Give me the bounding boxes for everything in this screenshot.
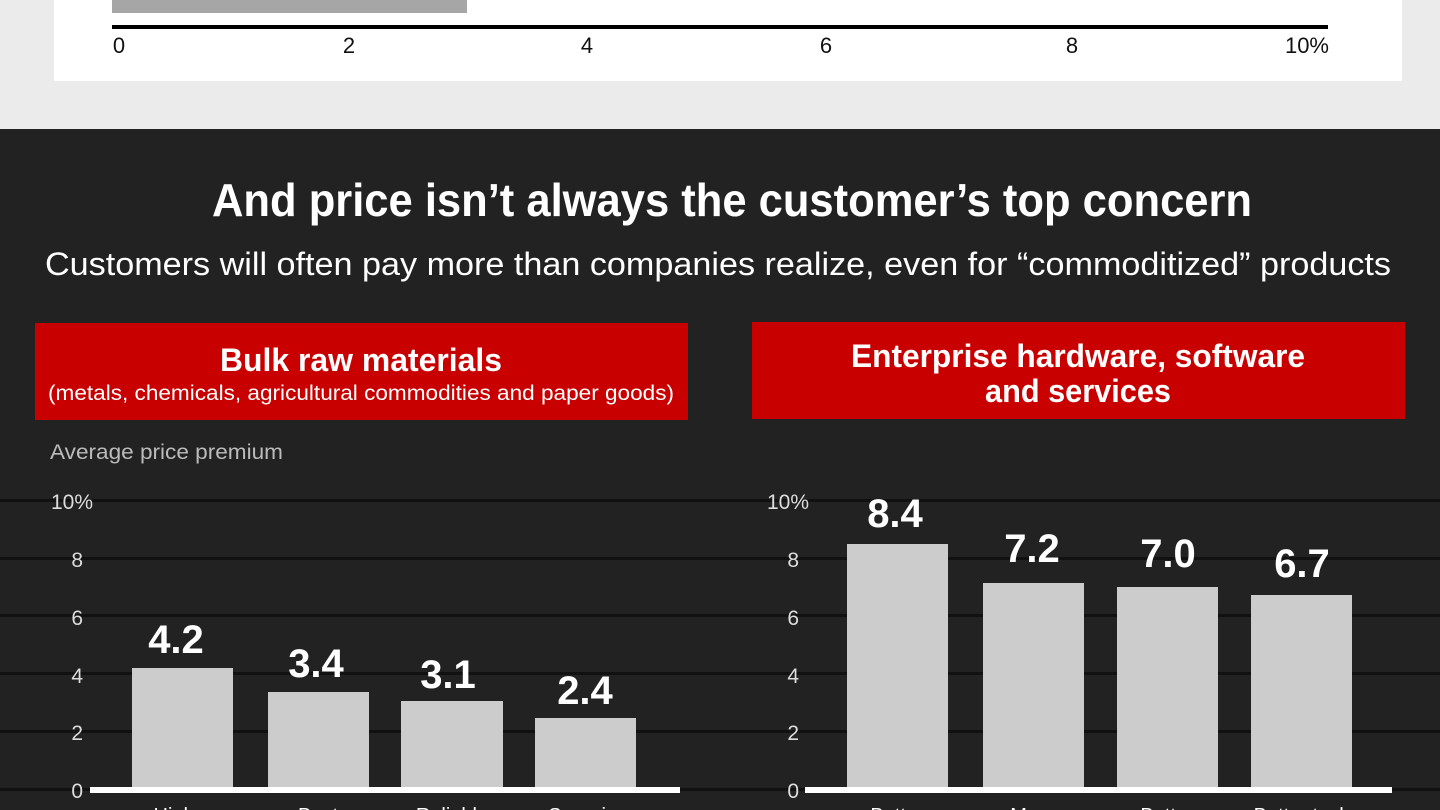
chart: bulk raw materials: 2.4 bbox=[557, 669, 614, 713]
chart: enterprise: 7.2 bbox=[1004, 527, 1060, 571]
chart: bulk raw materials: 0 bbox=[71, 780, 83, 803]
chart: enterprise: 8 bbox=[787, 549, 799, 572]
chart: bulk raw materials bbox=[51, 491, 680, 810]
chart: enterprise: 6.7 bbox=[1274, 542, 1330, 586]
axis: top x axis: 8 bbox=[1066, 33, 1078, 58]
title: And price isn’t always the customer’s top concern bbox=[212, 174, 1252, 226]
chart: enterprise: 6 bbox=[787, 607, 799, 630]
axis: top x axis bbox=[112, 25, 1329, 58]
panel header: bulk raw materials: Bulk raw materials bbox=[220, 342, 502, 378]
axis: top x axis: 2 bbox=[343, 33, 355, 58]
chart: enterprise bbox=[767, 491, 1392, 810]
chart: enterprise: 4 bbox=[787, 665, 799, 688]
chart: enterprise: 8.4 bbox=[867, 492, 924, 536]
axis: top x axis: 0 bbox=[113, 33, 125, 58]
chart: bulk raw materials: 2 bbox=[71, 722, 83, 745]
chart: bulk raw materials: 3.1 bbox=[420, 653, 476, 697]
panel header: bulk raw materials: (metals, chemicals, agricultural commodities and paper goods) bbox=[48, 382, 674, 405]
panel header: enterprise: Enterprise hardware, software bbox=[851, 338, 1305, 374]
panel header: enterprise bbox=[752, 322, 1405, 419]
chart: enterprise: 0 bbox=[787, 780, 799, 803]
chart: enterprise: 10% bbox=[767, 491, 809, 514]
chart: bulk raw materials: 6 bbox=[71, 607, 83, 630]
axis title: Average price premium bbox=[50, 441, 283, 464]
panel header: enterprise: and services bbox=[985, 373, 1171, 409]
subtitle: Customers will often pay more than companies realize, even for “commoditized” products bbox=[45, 246, 1391, 282]
chart: bulk raw materials: 4 bbox=[71, 665, 83, 688]
panel: top chart remainder bbox=[54, 0, 1402, 81]
chart: enterprise: 2 bbox=[787, 722, 799, 745]
axis: top x axis: 4 bbox=[581, 33, 593, 58]
chart: bulk raw materials: 4.2 bbox=[148, 618, 204, 662]
chart: enterprise: 7.0 bbox=[1140, 532, 1196, 576]
axis: top x axis: 10% bbox=[1285, 33, 1329, 58]
panel header: bulk raw materials bbox=[35, 323, 688, 420]
chart: bulk raw materials: 3.4 bbox=[288, 642, 345, 686]
axis: top x axis: 6 bbox=[820, 33, 832, 58]
bar: top horizontal bar bbox=[112, 0, 467, 13]
chart: bulk raw materials: 8 bbox=[71, 549, 83, 572]
chart: bulk raw materials: 10% bbox=[51, 491, 93, 514]
